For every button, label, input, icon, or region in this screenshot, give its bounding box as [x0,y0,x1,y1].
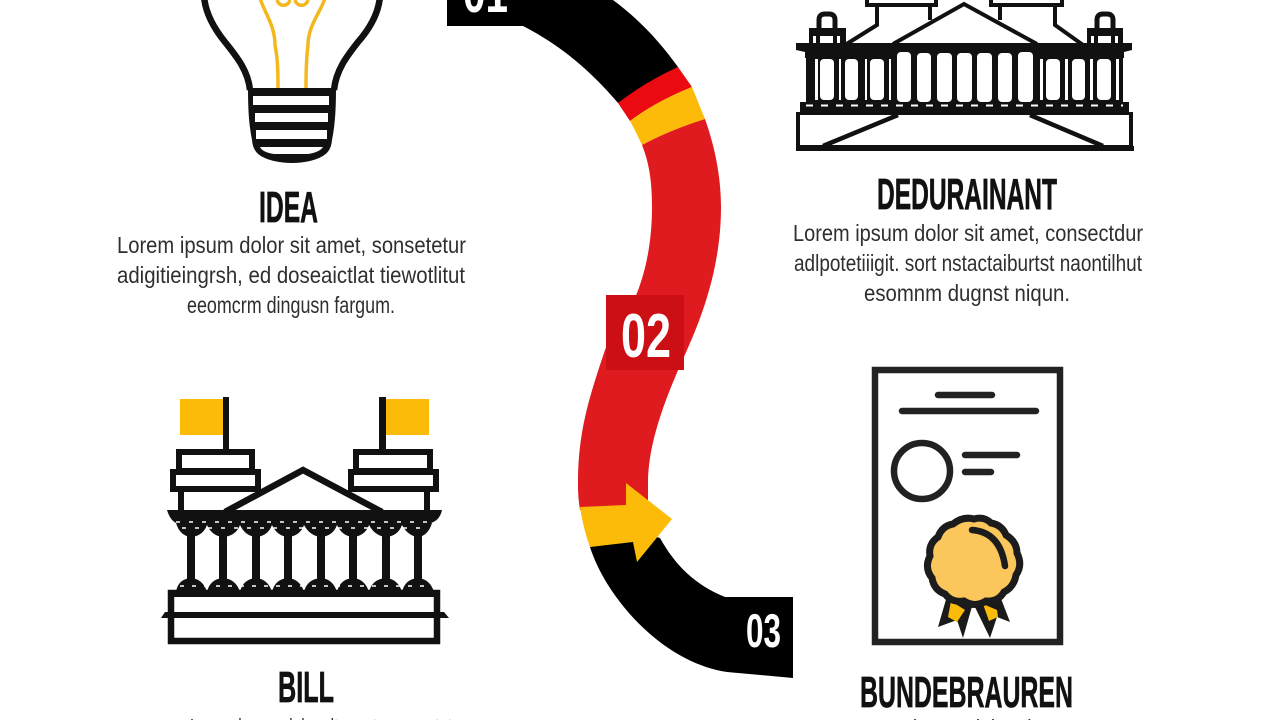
ribbon segment: black top with tag 01 [447,0,678,103]
heading: bundebrauren: BUNDEBRAUREN [860,668,1073,717]
text block: dedurainant description: Lorem ipsum dolor sit amet, consectdur [793,220,1143,246]
platform and base [800,102,1129,115]
ribbon band: red stripe [618,67,692,121]
text block: idea description: adigitieingrsh, ed doseaictlat tiewotlitut [117,262,466,288]
seal [927,518,1020,604]
text block: idea description [117,232,466,318]
seal ribbons [938,596,1010,638]
towers [173,452,436,512]
arrow: yellow [580,483,672,562]
column bases [176,578,434,592]
cornice [796,43,1132,58]
base dots [180,585,430,587]
heading: dedurainant: DEDURAINANT [877,170,1057,219]
tag 02: 02 [621,302,671,371]
capital dots [176,522,432,528]
text block: dedurainant description: esomnm dugnst niqun. [864,280,1070,306]
heading: idea: IDEA [259,183,318,232]
plinth [161,590,449,641]
heading: bill: BILL [278,663,334,712]
columns [187,535,422,583]
icon: light bulb [204,0,380,163]
text block: idea description: Lorem ipsum dolor sit amet, sonsetetur [117,232,466,258]
ribbon segment: black bottom with tag 03 [590,530,793,678]
text block: dedurainant description: adlpotetiiigit. sort nstactaiburtst naontilhut [794,250,1143,276]
ribbon band: yellow stripe [630,87,705,145]
colonnade [806,52,1123,107]
towers [819,0,1113,45]
ribbon path [447,0,793,678]
text block: dedurainant description [793,220,1143,306]
ribbon segment: red middle [578,119,721,512]
entablature and capitals [167,510,442,537]
icon: certificate with seal [875,370,1060,642]
flags [180,397,429,451]
icon: parliament building top [796,0,1134,151]
icon: parliament building with flags [161,397,449,641]
side turret bodies [809,28,1123,44]
text block: idea description: eeomcrm dingusn fargum. [187,292,395,318]
ribbon segment: black bottom with tag 03: 03 [746,604,781,657]
tag 02 [606,295,684,371]
